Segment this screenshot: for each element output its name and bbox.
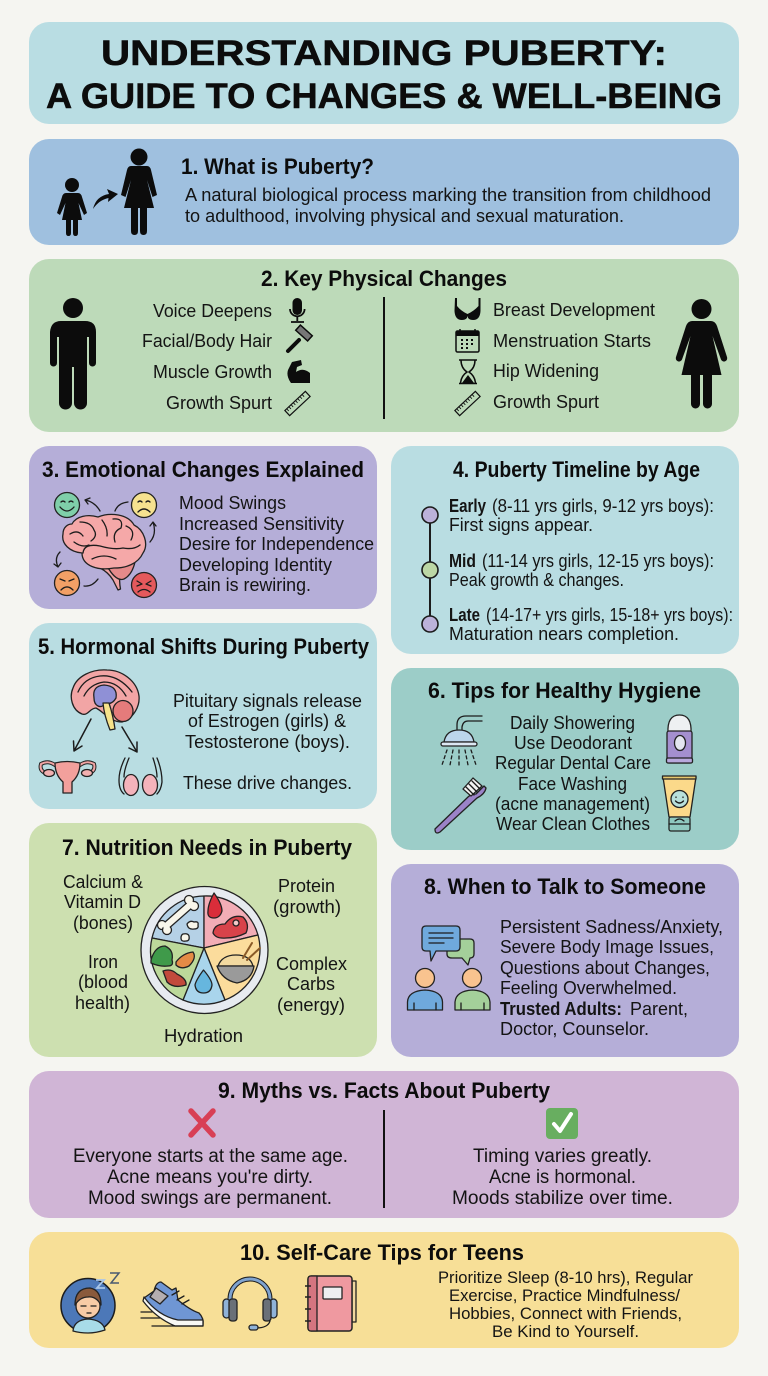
icon: calendar <box>456 329 479 352</box>
icon: bone <box>158 896 198 941</box>
icon: deodorant <box>666 715 692 763</box>
facts text <box>452 1146 673 1209</box>
divider <box>383 1110 385 1208</box>
text block: Feeling Overwhelmed. <box>500 977 677 998</box>
icon: water drop <box>195 970 212 993</box>
panel: hormonal shifts <box>29 623 377 809</box>
arrow <box>122 727 137 752</box>
heading: 7. Nutrition Needs in Puberty <box>62 835 352 860</box>
heading: 9. Myths vs. Facts About Puberty <box>218 1078 550 1103</box>
text block: Desire for Independence <box>179 533 374 554</box>
heading: 8. When to Talk to Someone <box>424 874 706 899</box>
icon: uterus <box>41 762 94 793</box>
panel: nutrition <box>29 823 377 1057</box>
icon: journal <box>305 1276 356 1331</box>
label: iron: (blood <box>78 971 128 992</box>
icon: brain <box>63 514 146 590</box>
male changes list: Growth Spurt <box>166 392 272 413</box>
panel: myths vs facts <box>29 1071 739 1218</box>
facts text: Timing varies greatly. <box>473 1146 652 1167</box>
title: A GUIDE TO CHANGES & WELL-BEING <box>46 77 722 116</box>
heading: 4. Puberty Timeline by Age <box>453 457 700 482</box>
heading: 10. Self-Care Tips for Teens <box>240 1240 524 1265</box>
myths text: Acne means you're dirty. <box>107 1167 313 1188</box>
icon: sad face <box>54 570 80 596</box>
icon: face wash tube <box>662 776 696 831</box>
text block: Pituitary signals release <box>173 690 362 711</box>
text block <box>438 1268 693 1341</box>
title <box>46 34 722 116</box>
panel: emotional changes <box>29 446 377 609</box>
icon: brain with moods <box>54 492 156 598</box>
text block: Persistent Sadness/Anxiety, <box>500 916 723 937</box>
label: iron <box>75 951 130 1013</box>
icon: male figure <box>50 298 96 410</box>
label: carbs: (energy) <box>277 994 345 1015</box>
icon: child growing into adult <box>57 148 157 236</box>
label: hydration: Hydration <box>164 1025 243 1046</box>
text block: mid <box>449 550 714 590</box>
male changes list: Facial/Body Hair <box>142 330 272 351</box>
icon: female figure <box>676 299 727 408</box>
text block: A natural biological process marking the transition from childhood <box>185 184 711 205</box>
label: protein <box>273 875 341 917</box>
label: calcium: Calcium & <box>63 871 144 892</box>
text block: to adulthood, involving physical and sexual maturation. <box>185 205 624 226</box>
icon: razor <box>288 325 312 351</box>
text block: Mood Swings <box>179 492 286 513</box>
female changes list: Breast Development <box>493 299 655 320</box>
text block: early: Early <box>449 495 487 516</box>
text block <box>179 492 374 595</box>
text block: Trusted Adults: <box>500 998 622 1019</box>
icon: ruler <box>455 391 480 416</box>
slice: iron <box>151 938 204 1000</box>
title: UNDERSTANDING PUBERTY: <box>101 34 667 73</box>
male changes list <box>142 300 272 413</box>
icon: brain section <box>71 670 139 730</box>
text block: Developing Identity <box>179 554 333 575</box>
facts text: Acne is hormonal. <box>489 1167 636 1188</box>
icon: ruler <box>285 391 310 416</box>
myths text <box>73 1146 348 1209</box>
label: iron: Iron <box>88 951 118 972</box>
panel: timeline <box>391 446 739 654</box>
heading: 2. Key Physical Changes <box>261 266 507 291</box>
text block <box>500 916 723 1039</box>
label: carbs <box>276 953 348 1015</box>
icon: rice bowl <box>217 943 260 983</box>
label: carbs: Carbs <box>287 973 335 994</box>
text block: Testosterone (boys). <box>185 731 350 752</box>
slice: hydration <box>183 948 225 1004</box>
text block: early: First signs appear. <box>449 514 593 535</box>
text block: late: Maturation nears completion. <box>449 623 679 644</box>
female changes list <box>493 299 655 412</box>
label: protein: (growth) <box>273 896 341 917</box>
icon: shower <box>441 716 482 765</box>
panel: title <box>29 22 739 124</box>
heading: 5. Hormonal Shifts During Puberty <box>38 634 369 659</box>
text block: of Estrogen (girls) & <box>188 710 347 731</box>
icon: people talking <box>408 926 490 1010</box>
text block <box>495 712 651 834</box>
facts text: Moods stabilize over time. <box>452 1188 673 1209</box>
text block <box>185 184 711 226</box>
text block: Prioritize Sleep (8-10 hrs), Regular <box>438 1268 693 1287</box>
text block: (acne management) <box>495 793 650 814</box>
text block: Parent, <box>630 998 688 1019</box>
icon: testes <box>119 758 162 796</box>
text block <box>173 690 362 793</box>
icon: happy face <box>54 492 80 518</box>
icon: headset <box>223 1279 277 1330</box>
icon: red cross <box>191 1111 213 1135</box>
male changes list: Voice Deepens <box>153 300 272 321</box>
panel: when to talk <box>391 864 739 1057</box>
text block: Doctor, Counselor. <box>500 1018 649 1039</box>
male changes list: Muscle Growth <box>153 361 272 382</box>
chart: nutrition plate <box>141 886 268 1014</box>
heading: 3. Emotional Changes Explained <box>42 457 364 482</box>
text block: Wear Clean Clothes <box>496 813 650 834</box>
female changes list: Hip Widening <box>493 360 599 381</box>
slice: calcium <box>152 896 204 948</box>
text block: Hobbies, Connect with Friends, <box>449 1304 682 1323</box>
label: iron: health) <box>75 992 130 1013</box>
text block: Exercise, Practice Mindfulness/ <box>449 1286 680 1305</box>
myths text: Mood swings are permanent. <box>88 1188 332 1209</box>
heading: 6. Tips for Healthy Hygiene <box>428 678 701 703</box>
heading: 1. What is Puberty? <box>181 154 374 179</box>
text block: Increased Sensitivity <box>179 513 345 534</box>
icon: microphone <box>290 298 305 322</box>
myths text: Everyone starts at the same age. <box>73 1146 348 1167</box>
icon: sleeping teen <box>61 1273 119 1333</box>
icon: greens <box>151 946 194 986</box>
text block: mid: Mid <box>449 550 476 571</box>
text block: mid: (11-14 yrs girls, 12-15 yrs boys): <box>482 550 714 571</box>
icon: running shoe <box>141 1282 203 1326</box>
text block: Use Deodorant <box>514 732 632 753</box>
text block: Face Washing <box>518 773 627 794</box>
text block: Brain is rewiring. <box>179 574 311 595</box>
text block: Regular Dental Care <box>495 752 651 773</box>
icon: angry face <box>132 572 156 598</box>
text block: Questions about Changes, <box>500 957 710 978</box>
panel: hygiene <box>391 668 739 850</box>
text block: early: (8-11 yrs girls, 9-12 yrs boys): <box>492 495 714 516</box>
label: calcium: (bones) <box>73 912 133 933</box>
panel: self-care <box>29 1232 739 1348</box>
text block: These drive changes. <box>183 772 352 793</box>
female changes list: Growth Spurt <box>493 391 599 412</box>
slice: carbs <box>204 935 260 1000</box>
text block: Severe Body Image Issues, <box>500 936 714 957</box>
icon: bra <box>454 298 480 320</box>
text block: Daily Showering <box>510 712 635 733</box>
slice: protein <box>204 896 258 948</box>
label: carbs: Complex <box>276 953 348 974</box>
label: calcium: Vitamin D <box>64 891 141 912</box>
icon: green check <box>546 1108 578 1139</box>
timeline graphic <box>422 507 438 632</box>
arrow <box>74 719 91 751</box>
text block: early <box>449 495 714 535</box>
panel: what is puberty <box>29 139 739 245</box>
icon: muscle <box>287 360 310 383</box>
icon: hourglass <box>459 360 477 384</box>
icon: worried face <box>132 492 156 518</box>
label: calcium <box>63 871 144 933</box>
icon: blood drop and meat <box>208 893 247 938</box>
panel: key physical changes <box>29 259 739 432</box>
text block: Be Kind to Yourself. <box>492 1322 639 1341</box>
mood arrows <box>54 498 156 586</box>
female changes list: Menstruation Starts <box>493 330 651 351</box>
text block: late <box>449 604 733 644</box>
label: protein: Protein <box>278 875 335 896</box>
text block: late: Late <box>449 604 480 625</box>
text block: mid: Peak growth & changes. <box>449 569 624 590</box>
icon: toothbrush <box>435 778 486 833</box>
divider <box>383 297 385 419</box>
text block: late: (14-17+ yrs girls, 15-18+ yrs boys): <box>486 604 733 625</box>
